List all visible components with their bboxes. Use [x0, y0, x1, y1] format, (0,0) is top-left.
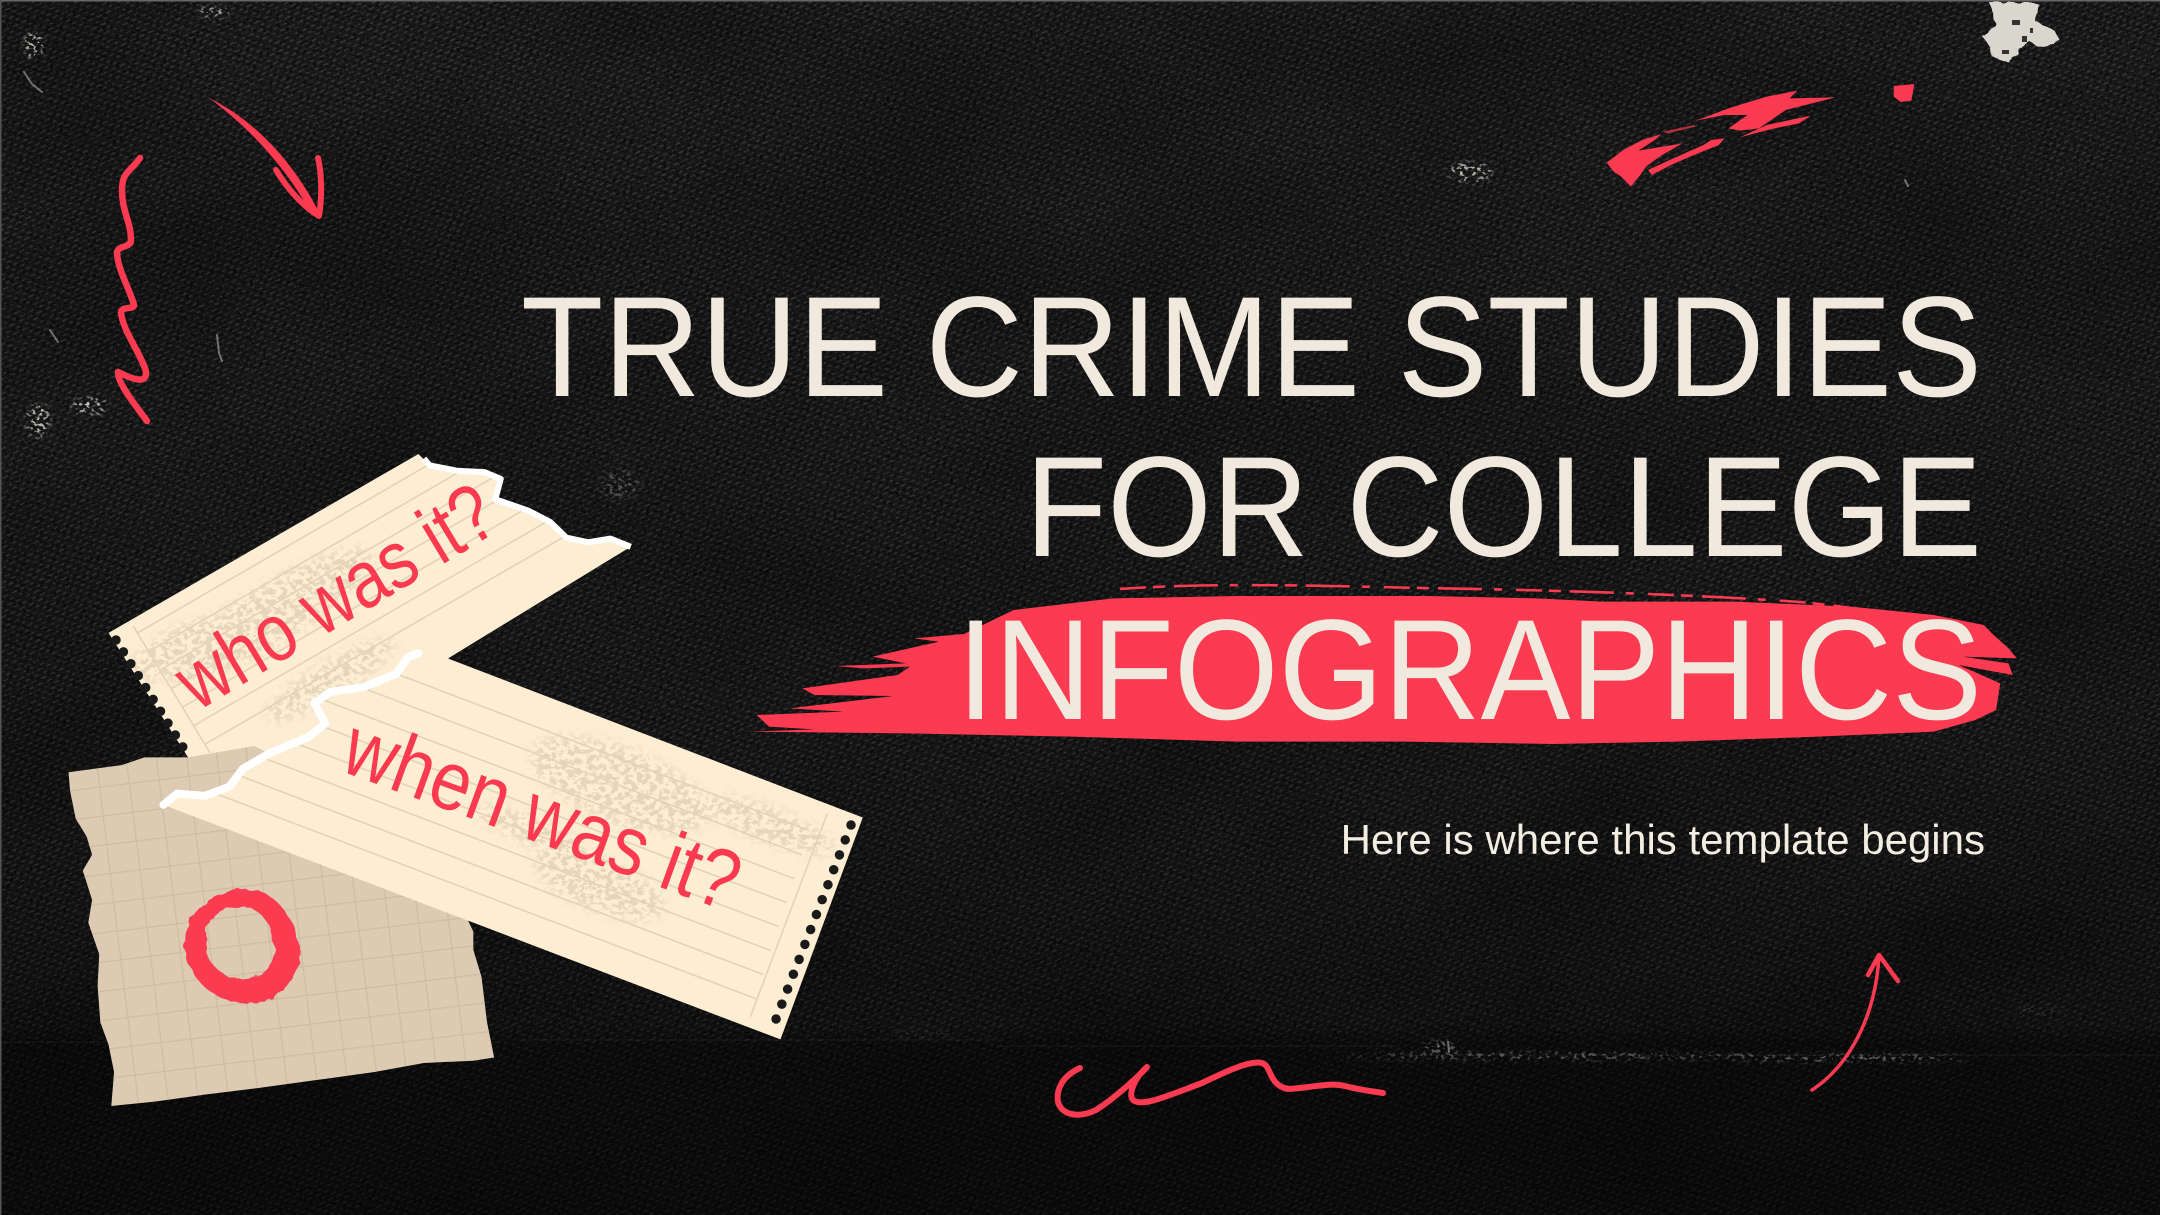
paper stain — [131, 546, 396, 724]
heading line 1: TRUE CRIME STUDIES — [521, 268, 1982, 427]
red hand-drawn circle — [185, 889, 300, 1003]
label text: when was it? — [331, 698, 753, 929]
subtitle: Here is where this template begins — [1341, 816, 1985, 863]
worn paint blob top right — [1983, 3, 2060, 62]
paper stain — [476, 734, 836, 922]
graph paper scrap — [68, 746, 494, 1106]
heading line 3: INFOGRAPHICS — [957, 591, 1982, 750]
torn note: who was it — [108, 454, 632, 758]
spiral holes — [773, 825, 851, 1027]
spiral holes — [116, 640, 186, 752]
note collage — [60, 379, 880, 1120]
red brush mark top right — [1607, 84, 1914, 187]
brush stroke behind INFOGRAPHICS — [748, 585, 2017, 744]
red scribble bottom — [1058, 1063, 1383, 1115]
torn note: when was it — [159, 649, 863, 1040]
red squiggle left — [117, 158, 147, 421]
heading line 2: FOR COLLEGE — [1025, 428, 1982, 587]
torn white edge — [163, 653, 418, 805]
label text: who was it? — [159, 466, 511, 728]
title — [521, 268, 2017, 750]
red arrow bottom right pointing up — [1812, 955, 1898, 1090]
torn white edge — [424, 458, 631, 547]
red arrow top left pointing down — [209, 98, 321, 216]
